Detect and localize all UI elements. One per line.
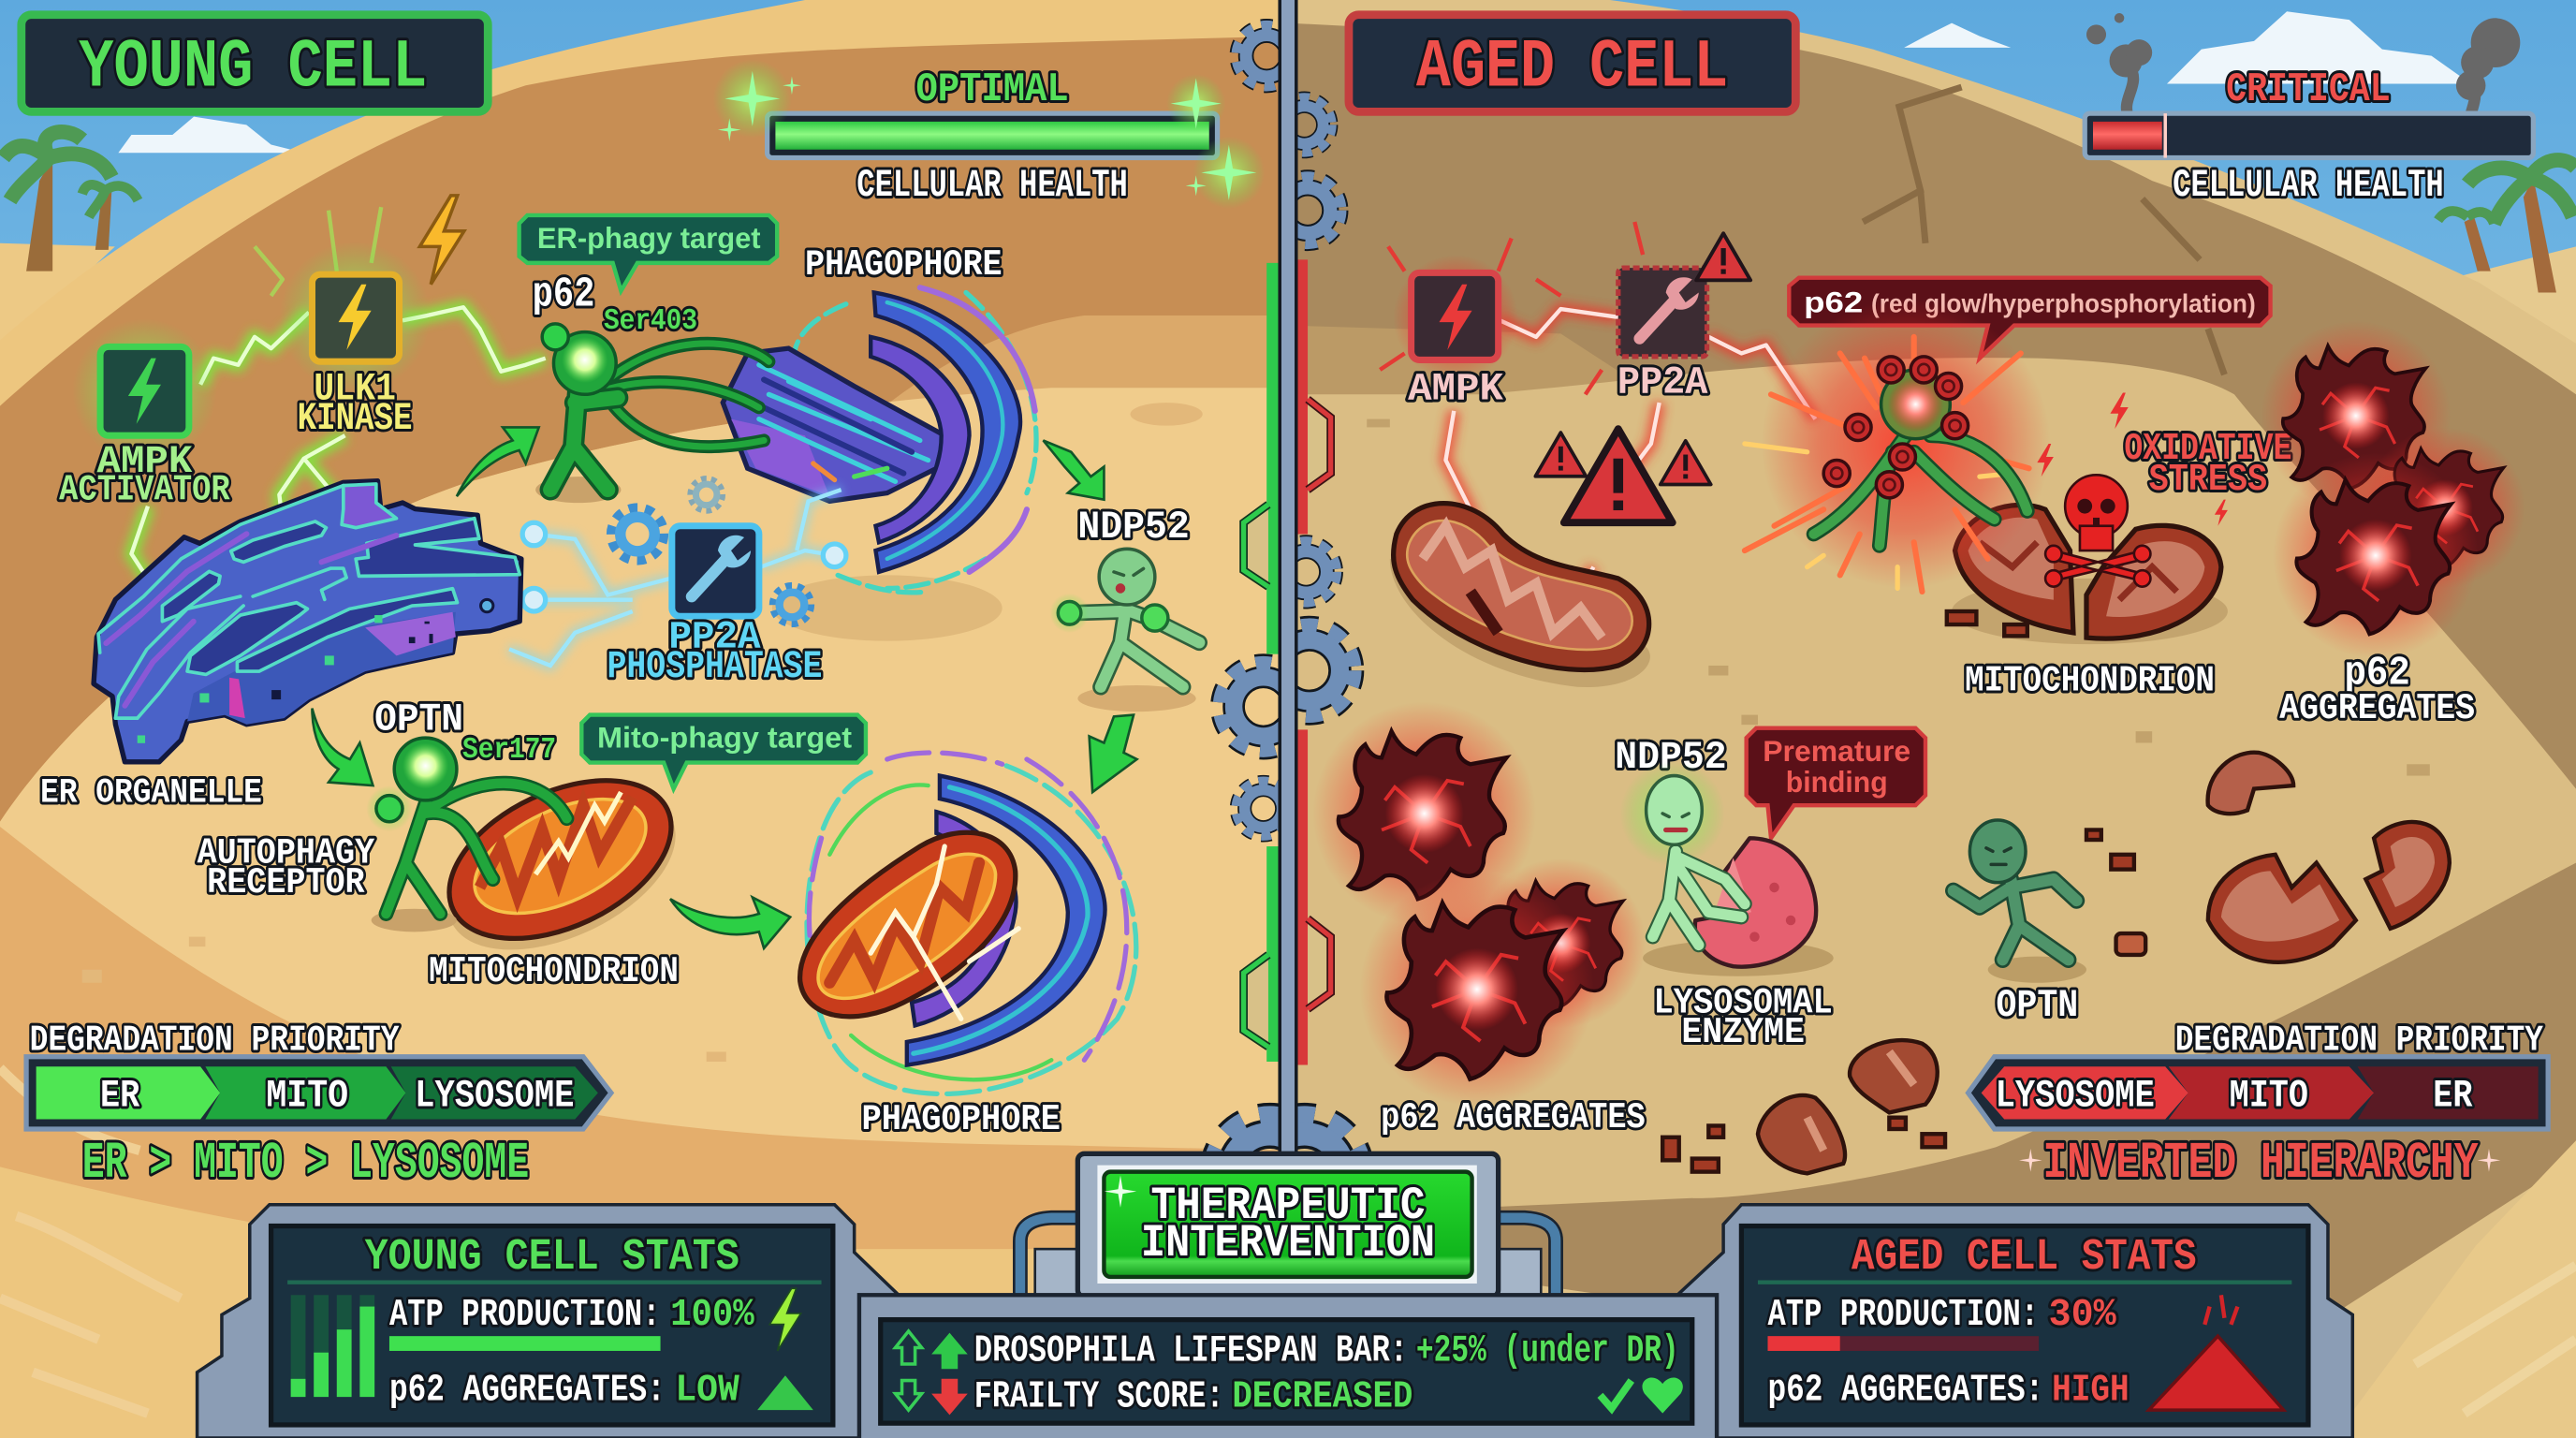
icon: ULK1 kinase: ULK1 — [314, 367, 396, 412]
arrow: ULK1 side to p62 — [457, 427, 539, 496]
icon: AMPK activator — [59, 319, 230, 511]
panel: therapeutic intervention: THERAPEUTIC — [1150, 1180, 1426, 1232]
panel: intervention results: DECREASED — [1232, 1376, 1412, 1419]
p62 aggregates: lower left cluster: p62 AGGREGATES — [1381, 1097, 1646, 1138]
callout: p62 hyperphosphorylation: (red glow/hyperphosphorylation) — [1871, 289, 2256, 318]
health bar: critical: CELLULAR HEALTH — [2173, 163, 2444, 208]
health bar: optimal — [768, 66, 1218, 208]
figure: OPTN receptor: RECEPTOR — [207, 862, 365, 903]
mitochondrion: damaged — [1390, 504, 1650, 687]
mitochondrion: fractured with skull: MITOCHONDRION — [1965, 660, 2215, 701]
callout: p62 hyperphosphorylation: p62 — [1804, 286, 1863, 319]
figure: NDP52: NDP52 — [1077, 505, 1190, 550]
health bar: critical: CRITICAL — [2226, 66, 2391, 113]
p62 aggregates: upper right cluster: AGGREGATES — [2279, 688, 2475, 729]
lightning: activation cascade — [131, 207, 546, 641]
mitochondrion: young: MITOCHONDRION — [429, 951, 679, 992]
degradation priority: young: DEGRADATION PRIORITY — [30, 1020, 400, 1062]
phagophore with ER cargo: PHAGOPHORE — [805, 244, 1003, 286]
central divider with gears — [1214, 0, 1360, 1229]
p62 aggregates: upper right cluster — [2261, 321, 2525, 729]
figure: OPTN receptor: Ser177 — [462, 734, 556, 767]
header: young cell — [22, 15, 488, 111]
arrow: mitochondrion to phagophore — [670, 897, 790, 948]
figure: hyperphosphorylated p62 — [1745, 299, 2050, 592]
panel: young cell stats: LOW — [675, 1370, 740, 1413]
broken mitochondrion debris — [1662, 611, 2450, 1173]
header: aged cell: AGED CELL — [1416, 29, 1728, 107]
icon: PP2A phosphatase: PP2A — [668, 615, 761, 660]
health bar: optimal: OPTIMAL — [915, 66, 1069, 113]
icon: PP2A aged — [1617, 233, 1750, 405]
ER organelle: ER ORGANELLE — [40, 774, 262, 814]
palm trees — [4, 132, 2576, 292]
panel: aged cell stats: 30% — [2049, 1294, 2116, 1337]
callout: premature binding — [1747, 728, 1925, 838]
figure: OPTN receptor: OPTN — [374, 697, 463, 741]
figure: NDP52 with lysosomal enzyme: ENZYME — [1681, 1012, 1805, 1053]
figure: p62 receptor: Ser403 — [604, 305, 697, 338]
callout: ER-phagy target — [520, 215, 777, 291]
icon: skull and crossbones — [2045, 475, 2150, 587]
p62 aggregates: lower left cluster — [1312, 702, 1646, 1138]
degradation priority: aged: MITO — [2230, 1073, 2308, 1118]
icon: AMPK activator: ACTIVATOR — [59, 470, 230, 511]
panel: aged cell stats: AGED CELL STATS — [1852, 1233, 2197, 1283]
degradation priority: aged: ER — [2433, 1073, 2473, 1118]
warning triangles — [1535, 429, 1711, 522]
health bar: critical — [2085, 13, 2533, 208]
panel: aged cell stats: p62 AGGREGATES: — [1767, 1370, 2043, 1413]
sparkles — [713, 59, 1265, 209]
arrow: ER to OPTN — [312, 709, 373, 785]
degradation priority: aged: LYSOSOME — [1996, 1073, 2155, 1118]
label: oxidative stress: OXIDATIVE — [2124, 428, 2291, 471]
phagophore with ER cargo — [723, 244, 1036, 593]
degradation priority: young — [26, 1020, 611, 1193]
icon: ULK1 kinase: KINASE — [298, 396, 413, 441]
degradation priority: aged — [1969, 1020, 2548, 1193]
figure: NDP52 with lysosomal enzyme: NDP52 — [1615, 735, 1727, 780]
panel: young cell stats: ATP PRODUCTION: — [389, 1294, 661, 1337]
panel: young cell stats — [198, 1205, 899, 1438]
icon: PP2A phosphatase — [607, 479, 822, 689]
ER organelle — [40, 481, 521, 814]
panel: young cell stats: 100% — [670, 1294, 754, 1337]
figure: OPTN receptor — [198, 697, 567, 932]
icon: free lightning bolt — [419, 196, 464, 285]
figure: NDP52 with lysosomal enzyme — [1615, 735, 1834, 1053]
label: oxidative stress: STRESS — [2149, 459, 2267, 502]
panel: aged cell stats: HIGH — [2052, 1370, 2130, 1413]
figure: NDP52 with lysosomal enzyme: LYSOSOMAL — [1654, 982, 1833, 1023]
icon: AMPK aged: AMPK — [1408, 367, 1504, 412]
panel: intervention results: +25% (under DR) — [1416, 1329, 1679, 1372]
mitochondrion: fractured with skull — [1952, 475, 2228, 701]
icon: AMPK aged — [1393, 255, 1518, 412]
figure: OPTN aged: OPTN — [1996, 983, 2078, 1028]
circuit lines around PP2A — [509, 490, 846, 666]
icon: AMPK activator: AMPK — [97, 439, 193, 484]
panel: therapeutic intervention: INTERVENTION — [1141, 1217, 1435, 1269]
panel: young cell stats: p62 AGGREGATES: — [389, 1370, 666, 1413]
panel: aged cell stats: ATP PRODUCTION: — [1767, 1294, 2039, 1337]
header: aged cell — [1349, 15, 1795, 111]
degradation priority: young: ER — [100, 1073, 140, 1118]
degradation priority: young: MITO — [266, 1073, 348, 1118]
degradation priority: young: LYSOSOME — [415, 1073, 574, 1118]
lightning: stressed signalling — [1380, 222, 1815, 594]
background: young cell desert — [0, 0, 1288, 1438]
icon: red aggregate pile — [2149, 1295, 2284, 1410]
panel: aged cell stats — [1677, 1205, 2352, 1438]
callout: premature binding: Premature — [1763, 734, 1910, 768]
stat mini bars — [291, 1295, 374, 1397]
figure: OPTN aged — [1954, 820, 2086, 1028]
callout: p62 hyperphosphorylation — [1789, 278, 2271, 359]
panel: young cell stats: YOUNG CELL STATS — [365, 1233, 739, 1283]
icon: PP2A phosphatase: PHOSPHATASE — [607, 644, 822, 689]
icon: PP2A aged: PP2A — [1617, 360, 1708, 405]
header: young cell: YOUNG CELL — [79, 29, 427, 107]
icon: ULK1 kinase — [279, 242, 431, 441]
arrow: phagophore to NDP52 — [1043, 440, 1104, 500]
label: oxidative stress — [2037, 393, 2291, 526]
panel: intervention results: DROSOPHILA LIFESPAN BAR: — [974, 1329, 1408, 1372]
callout: Mito-phagy target: Mito-phagy target — [597, 721, 853, 755]
health bar: optimal: CELLULAR HEALTH — [856, 163, 1128, 208]
panel: therapeutic intervention — [1020, 1153, 1556, 1297]
phagophore engulfing mitochondrion: PHAGOPHORE — [862, 1099, 1061, 1140]
callout: ER-phagy target: ER-phagy target — [537, 221, 761, 255]
figure: p62 receptor: p62 — [533, 271, 594, 319]
mitochondrion: young — [424, 748, 700, 992]
callout: Mito-phagy target — [581, 715, 866, 789]
degradation priority: young: ER > MITO > LYSOSOME — [82, 1136, 529, 1193]
background: aged cell desert — [1288, 0, 2576, 1438]
panel: intervention results — [859, 1295, 1717, 1438]
panel: intervention results: FRAILTY SCORE: — [974, 1376, 1224, 1419]
figure: NDP52 — [1050, 505, 1199, 712]
figure: p62 receptor — [533, 271, 768, 503]
figure: OPTN receptor: AUTOPHAGY — [198, 833, 375, 874]
p62 aggregates: upper right cluster: p62 — [2345, 650, 2410, 697]
callout: premature binding: binding — [1786, 765, 1888, 799]
phagophore engulfing mitochondrion — [800, 753, 1136, 1140]
arrow: NDP52 to mitophagy phagophore — [1090, 715, 1137, 792]
